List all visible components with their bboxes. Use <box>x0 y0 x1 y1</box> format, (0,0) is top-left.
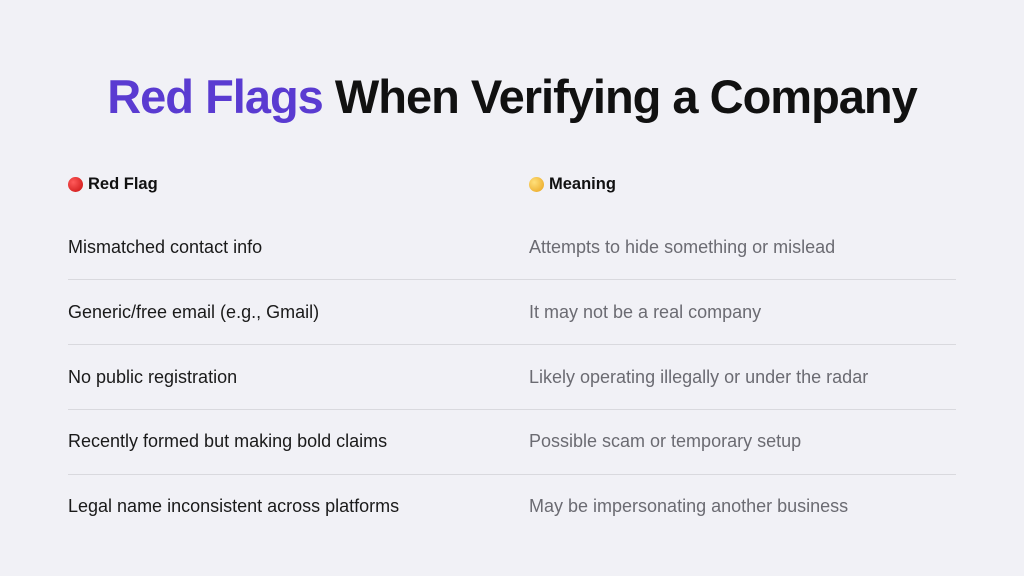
row 5 <box>68 496 848 516</box>
row 1: Mismatched contact info <box>68 237 262 257</box>
title: Red Flags When Verifying a Company <box>107 70 917 123</box>
row 4 <box>68 431 801 451</box>
row 3 <box>68 367 868 387</box>
row 1 <box>68 237 835 257</box>
row 4: Possible scam or temporary setup <box>529 431 801 451</box>
row 3: Likely operating illegally or under the radar <box>529 367 868 387</box>
row 2 <box>68 302 761 322</box>
row 5: Legal name inconsistent across platforms <box>68 496 399 516</box>
row 1: Attempts to hide something or mislead <box>529 237 835 257</box>
header: meaning: Meaning <box>549 175 616 193</box>
header: red flag: Red Flag <box>88 175 158 193</box>
row 5: May be impersonating another business <box>529 496 848 516</box>
row 2: It may not be a real company <box>529 302 761 322</box>
row 2: Generic/free email (e.g., Gmail) <box>68 302 319 322</box>
row 3: No public registration <box>68 367 237 387</box>
row 4: Recently formed but making bold claims <box>68 431 387 451</box>
